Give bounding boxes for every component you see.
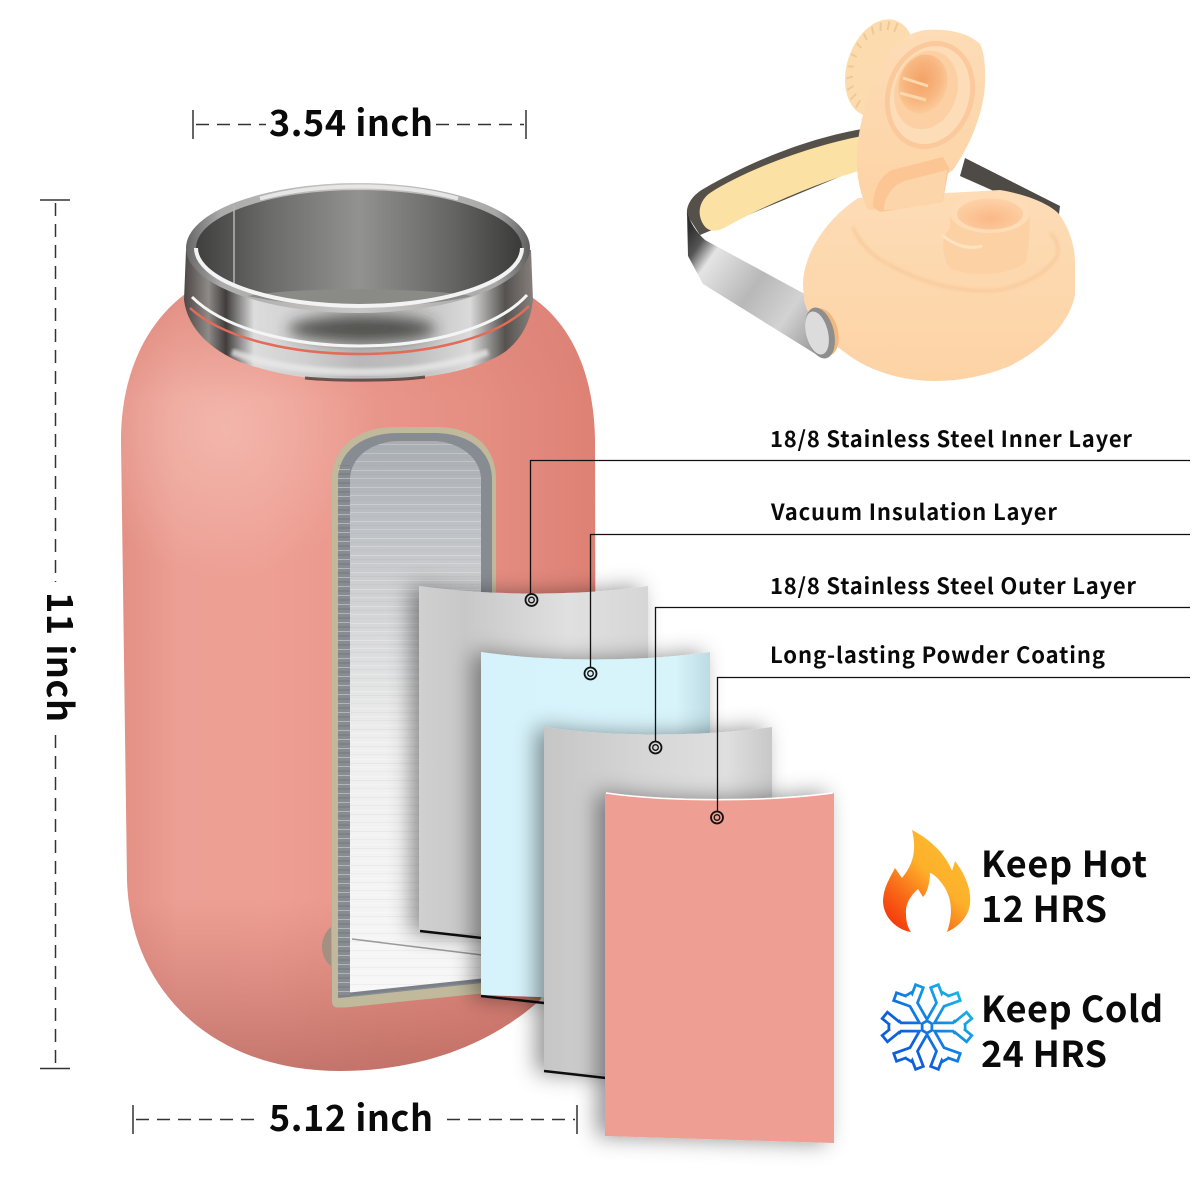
callout: powder coating: Long-lasting Powder Coating (770, 638, 1105, 670)
text: keep hot: Keep Hot (981, 836, 1147, 888)
layer sheets (419, 586, 834, 1143)
lid knob (833, 10, 927, 126)
sheet: stainless outer layer (544, 727, 772, 1078)
callout: stainless outer layer (650, 569, 1190, 754)
handle far side (960, 158, 1060, 222)
handle strap front (687, 212, 838, 358)
badge: keep cold (888, 981, 1163, 1078)
spout (942, 193, 1030, 274)
dimension: bottom width 5.12 inch: 5.12 inch (269, 1090, 433, 1142)
sheet: vacuum layer (481, 652, 710, 1003)
base marker (322, 927, 331, 966)
insulation outline (332, 427, 496, 1008)
cap base contour (853, 227, 1058, 291)
lid hinge (873, 157, 949, 212)
icon: flame (883, 830, 970, 932)
callout: stainless outer layer: 18/8 Stainless Steel Outer Layer (770, 569, 1136, 601)
steel neck (184, 250, 533, 381)
text: 24 hrs: 24 HRS (981, 1026, 1107, 1078)
bottle interior (196, 187, 522, 306)
dimension: height 11 inch: 11 inch (36, 592, 88, 722)
handle grip (700, 136, 862, 231)
bottom edge (350, 980, 482, 994)
callout: vacuum layer: Vacuum Insulation Layer (770, 495, 1057, 527)
lid underside (871, 29, 989, 161)
inner steel (350, 441, 481, 993)
strap pin (800, 304, 843, 362)
outer wall (338, 433, 492, 998)
dimension: top width 3.54 inch: 3.54 inch (269, 95, 433, 147)
lid with handle (687, 10, 1075, 381)
dimension: height 11 inch (36, 200, 88, 1068)
text: keep cold: Keep Cold (981, 981, 1163, 1033)
text: 12 hrs: 12 HRS (981, 881, 1107, 933)
bottle with cutaway (121, 183, 596, 1071)
dimension: top width 3.54 inch (193, 95, 526, 147)
dimension: bottom width 5.12 inch (133, 1090, 577, 1142)
callout: stainless inner layer: 18/8 Stainless Steel Inner Layer (770, 422, 1132, 454)
icon: snowflake (888, 990, 966, 1064)
flip lid (857, 30, 985, 210)
badge: keep hot (883, 830, 1147, 933)
floor seam (352, 939, 482, 955)
handle strap back (687, 129, 880, 235)
cutaway window (322, 427, 496, 1008)
sheet: stainless inner layer (419, 586, 648, 938)
callout: vacuum layer (584, 495, 1190, 680)
bottle body (121, 270, 596, 1071)
callout: stainless inner layer (526, 422, 1190, 606)
callout: powder coating (711, 638, 1190, 824)
steel rim (186, 183, 530, 313)
cap base (803, 190, 1075, 381)
sheet: powder coating (605, 793, 834, 1143)
